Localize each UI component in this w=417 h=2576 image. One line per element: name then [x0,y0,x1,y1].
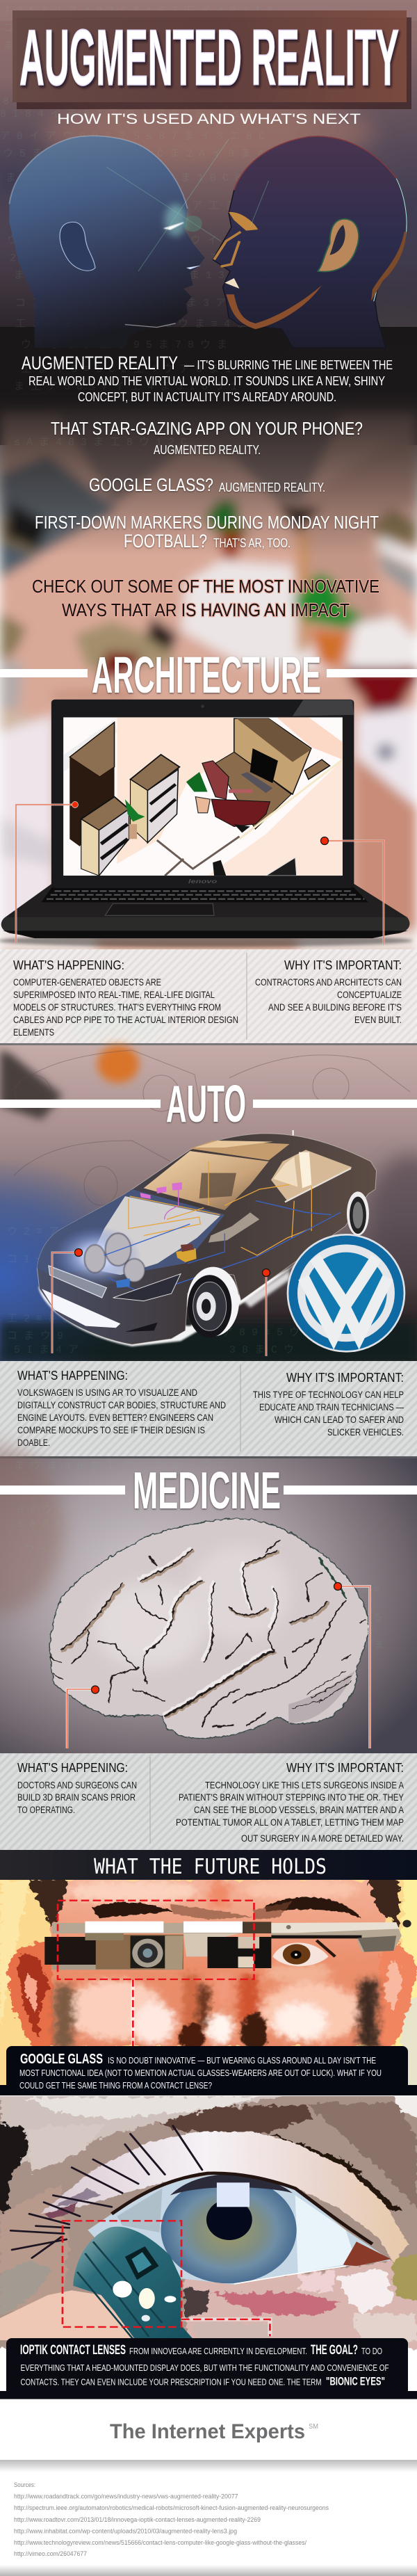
banner: what the future holds: WHAT THE FUTURE HOLDS [94,1855,327,1879]
laptop base [0,884,413,947]
underglow [38,1229,345,1346]
lens flare [106,139,269,271]
what's happening: COMPUTER-GENERATED OBJECTS ARE [13,977,161,988]
callout: ioptik contact lenses: "BIONIC EYES" [326,2374,385,2388]
lash line [112,2173,373,2244]
callout: ioptik contact lenses: IOPTIK CONTACT LENSES [20,2343,126,2358]
laptop [0,700,413,947]
car illustration [37,1130,405,1353]
panel: medicine background: 5 [375,1612,382,1624]
photo: man wearing google glass [0,1873,417,2093]
what's happening: WHAT'S HAPPENING: [17,1369,128,1383]
blurred office background photo [0,327,417,1068]
heading: auto [0,1074,417,1133]
matrix code rain: ウ I ま ウ ア 工 ウ 9 5 ま 7 8 ウ ま [21,339,227,351]
eye [272,1940,335,1966]
matrix code rain: ま 工 イ 5 8 I ウ 8 ア イ 2 1 8 C ま [3,40,213,52]
callouts: auto [52,1249,270,1356]
what's happening [17,1761,137,1815]
logo: the internet experts: The Internet Experts [110,2420,305,2443]
title panel [13,10,411,109]
laptop screen: office floor plan [63,717,343,876]
why it's important: WHY IT'S IMPORTANT: [284,958,402,972]
heading: auto: AUTO [166,1074,246,1133]
intro copy: THAT'S AR, TOO. [213,536,291,550]
sources: http://www.inhabitat.com/wp-content/uploads/2010/03/augmented-reality-lens3.jpg [14,2528,237,2535]
what's happening: MODELS OF STRUCTURES. THAT'S EVERYTHING FROM [13,1002,221,1013]
panel: architecture text [0,949,417,1043]
laptop: lenovo [188,878,218,885]
heading: medicine [0,1461,417,1520]
callouts: medicine [67,1583,370,1748]
panel: auto text [0,1361,417,1458]
subtitle: HOW IT'S USED AND WHAT'S NEXT [57,111,361,127]
why it's important [176,1761,404,1844]
panel: auto background: コ I ≤ ア 5 [7,1254,72,1266]
matrix code rain: ウ 5 ま 8 ウ 3 イ 5 7 8 ≡ C ま 2 A イ 9 ま 4 [3,147,263,160]
what's happening: COMPARE MOCKUPS TO SEE IF THEIR DESIGN IS [17,1425,205,1435]
intro copy: AUGMENTED REALITY. [154,443,261,457]
panel: medicine background: ま ウ ま 8 8 ま 工 ウ ウ ウ 9 ー ウ C [14,1460,224,1472]
panel: auto background [0,1043,417,1394]
photo: eye with contact lens [0,2088,417,2349]
matrix code rain: 工 ま イ 8 ≡ 5 C 2 工 4 ウ ア 8 ま I [21,363,231,376]
why it's important [253,1371,404,1438]
dashed marker [63,2221,270,2336]
panel: intro background [0,0,417,466]
rear wheel [347,1191,369,1236]
what's happening [17,1369,226,1448]
callout: google glass: GOOGLE GLASS [20,2052,103,2067]
panel: medicine text [0,1753,417,1850]
heading: medicine: MEDICINE [133,1461,281,1520]
intro copy: AUGMENTED REALITY [22,353,178,373]
intro copy: GOOGLE GLASS? [89,474,213,495]
banner: what the future holds [0,1850,417,1880]
call to action: WAYS THAT AR IS HAVING AN IMPACT [62,599,350,620]
brain illustration [50,1519,368,1739]
panel: auto background: ウ 2 ≡ ア 工 ウ [7,1225,92,1238]
grille and bumper [49,1266,106,1298]
sources: http://vimeo.com/26047677 [14,2550,87,2557]
matrix code rain: ま 工 ア 5 8 ≤ 7 イ 工 4 ま 3 I 8 ウ 1 [14,380,237,393]
matrix code rain: 工 ま ア 8 I 9 ア 工 ま 8 5 ウ ま ≡ 4 ま 7 [15,318,259,330]
matrix code rain: ま ウ A 4 ま 8 工 ア 8 ウ 7 3 ま 1 0 C 8 [6,172,241,184]
why it's important: CONCEPTUALIZE [337,990,402,1000]
glass device [44,1920,411,1970]
white footer panel [0,2399,417,2576]
panel: medicine background [0,1447,417,1753]
callouts: architecture [16,801,384,944]
panel: auto background: ア 8 9 ≡ 5 ウ [222,1326,300,1339]
engine bay glow [85,1196,220,1275]
vw logo [287,1234,405,1353]
contact lens [73,2227,194,2340]
callout: google glass [0,2046,417,2095]
painted skin [0,1873,417,2093]
what's happening: BUILD 3D BRAIN SCANS PRIOR [17,1792,136,1803]
panel: medicine background: ウ ≤ 7 工 7 ま 8 C 1 ま ≤ [24,1543,172,1556]
callout: ioptik contact lenses: TO DO [361,2346,382,2356]
matrix code rain: コ 工 C 4 = A 工 ウ ま 8 I 5 ま 3 ア 9 2 ウ C [15,297,280,309]
what's happening: DOABLE. [17,1438,50,1448]
front wheel [187,1267,239,1337]
callout: ioptik contact lenses: CONTACTS. THEY CAN EVEN INCLUDE YOUR PRESCRIPTION IF YOU NEED ONE. THE TERM [21,2377,321,2387]
eyeball [88,2175,391,2285]
panel: medicine background: 9 ≡ [361,1584,380,1596]
callout: google glass: COULD GET THE SAME THING FROM A CONTACT LENSE? [19,2080,212,2091]
intro copy: FOOTBALL? [124,531,207,552]
logo: the internet experts: SM [309,2423,318,2431]
matrix code rain: 2 1 ア 9 C 8 ま 工 ≤ 8 ウ エ イ 5 7 ま [10,252,233,264]
matrix code rain: 8 I 8 4 イ ま 8 I 工 ウ 5 ア 8 C 8 = A ≤ 4 [0,108,252,120]
matrix code rain: コ ま 8 ウ エ ノ 7 ア 4 C 8 ま 5 工 ウ ア 7 [3,22,251,35]
what's happening: ELEMENTS [13,1027,54,1038]
sources: http://www.roadtovr.com/2013/01/18/innovega-ioptik-contact-lenses-augmented-reality-2269 [14,2516,261,2523]
sources: Sources: [14,2481,35,2488]
car body [37,1134,377,1344]
sources: http://www.technologyreview.com/news/515666/contact-lens-computer-like-google-glass-without-the-glasses/ [14,2539,306,2546]
what's happening: WHAT'S HAPPENING: [13,958,124,972]
intro copy: AUGMENTED REALITY. [219,481,325,494]
matrix code rain: I 7 E 8 9 ア 4 8 I C 8 A 5 7 工 イ 4 8 7 I 8 [4,6,273,17]
matrix code rain: ウ 9 C ア ま ≤ 7 ま 4 8 1 工 8 ウ イ 2 C [7,234,243,247]
matrix code rain: ア 0 イ ア ウ 9 9 2 ま 5 ≤ 8 7 ま イ 3 エ 8 C [0,130,265,143]
sources: http://www.roadandtrack.com/go/news/industry-news/vws-augmented-reality-20077 [14,2493,238,2499]
sources: http://spectrum.ieee.org/automaton/robotics/medical-robots/microsoft-kinect-fusion-augmented-reality-neurosurgeons [14,2504,329,2511]
laptop lid [51,700,354,888]
matrix code rain: 4 ≤ ま 1 ア 5 8 7 C ウ 9 ア 工 ま [42,200,236,212]
wiring [104,1161,341,1295]
why it's important: SLICKER VEHICLES. [327,1427,404,1438]
what's happening [13,958,238,1038]
panel: medicine background: 9 8 ウ ウ 工 ま 7 C ま [17,1504,145,1516]
what's happening: ENGINE LAYOUTS. EVEN BETTER? ENGINEERS CAN [17,1412,213,1423]
intro copy [22,353,393,552]
left head (blue glass) [9,136,205,348]
what's happening: VOLKSWAGEN IS USING AR TO VISUALIZE AND [17,1387,197,1398]
matrix code rain [0,6,280,449]
what's happening: WHAT'S HAPPENING: [17,1761,128,1775]
right head (solarised) [213,136,407,348]
intro copy: CONCEPT, BUT IN ACTUALITY IT'S ALREADY AROUND. [78,390,336,404]
brain folds [51,1540,366,1727]
what's happening: TO OPERATING. [17,1805,75,1815]
painted skin around the eye [0,2088,417,2349]
panel: auto background: 3 8 ま C ウ [229,1344,294,1356]
what's happening: DOCTORS AND SURGEONS CAN [17,1780,137,1790]
heads illustration [9,136,407,348]
callout: ioptik contact lenses [0,2338,417,2399]
finger [0,2290,136,2340]
what's happening: DIGITALLY CONSTRUCT CAR BODIES, STRUCTURE AND [17,1400,226,1410]
windows [144,1151,269,1210]
what's happening: SUPERIMPOSED INTO REAL-TIME, REAL-LIFE DIGITAL [13,990,215,1000]
panel: auto background: 5 I ま 4 ア [14,1344,79,1356]
what's happening: CABLES AND PCP PIPE TO THE ACTUAL INTERIOR DESIGN [13,1015,238,1025]
panel: medicine background: 8 ま [361,1640,384,1652]
sources [14,2481,329,2557]
dashed marker [58,1901,254,2047]
callout: ioptik contact lenses: THE GOAL? [311,2343,358,2358]
eyebrows [92,1897,361,1919]
why it's important [255,958,402,1025]
why it's important: WHY IT'S IMPORTANT: [286,1761,404,1775]
matrix code rain: ≤ A ま 4 8 3 ま 工 8 ウ 1 2 C [14,436,187,449]
panel: medicine background: ≤ A 8 4 ≡ 9 5 ま I ま [17,1518,145,1530]
panel: auto background: コ ま ウ 9 [7,1330,63,1342]
callout: ioptik contact lenses: FROM INNOVEGA ARE CURRENTLY IN DEVELOPMENT. [129,2346,307,2356]
why it's important: EVEN BUILT. [354,1015,402,1025]
iris [161,2174,297,2283]
hood [37,1189,224,1275]
matrix code rain: 8 = ウ 1 イ 工 8 ま ウ ま A 8 ≡ 9 7 ウ 2 C 8 [3,95,263,108]
panel: auto background: 工 2 ≡ 8 ま [7,1313,72,1325]
upper lid [40,2132,408,2262]
why it's important: WHY IT'S IMPORTANT: [286,1371,404,1385]
matrix code rain: ま ア ≡ 8 ウ ま 4 8 I ア 工 2 ま 1 3 ア 5 [14,269,254,282]
call to action [32,576,379,620]
eyelashes [10,2126,202,2258]
